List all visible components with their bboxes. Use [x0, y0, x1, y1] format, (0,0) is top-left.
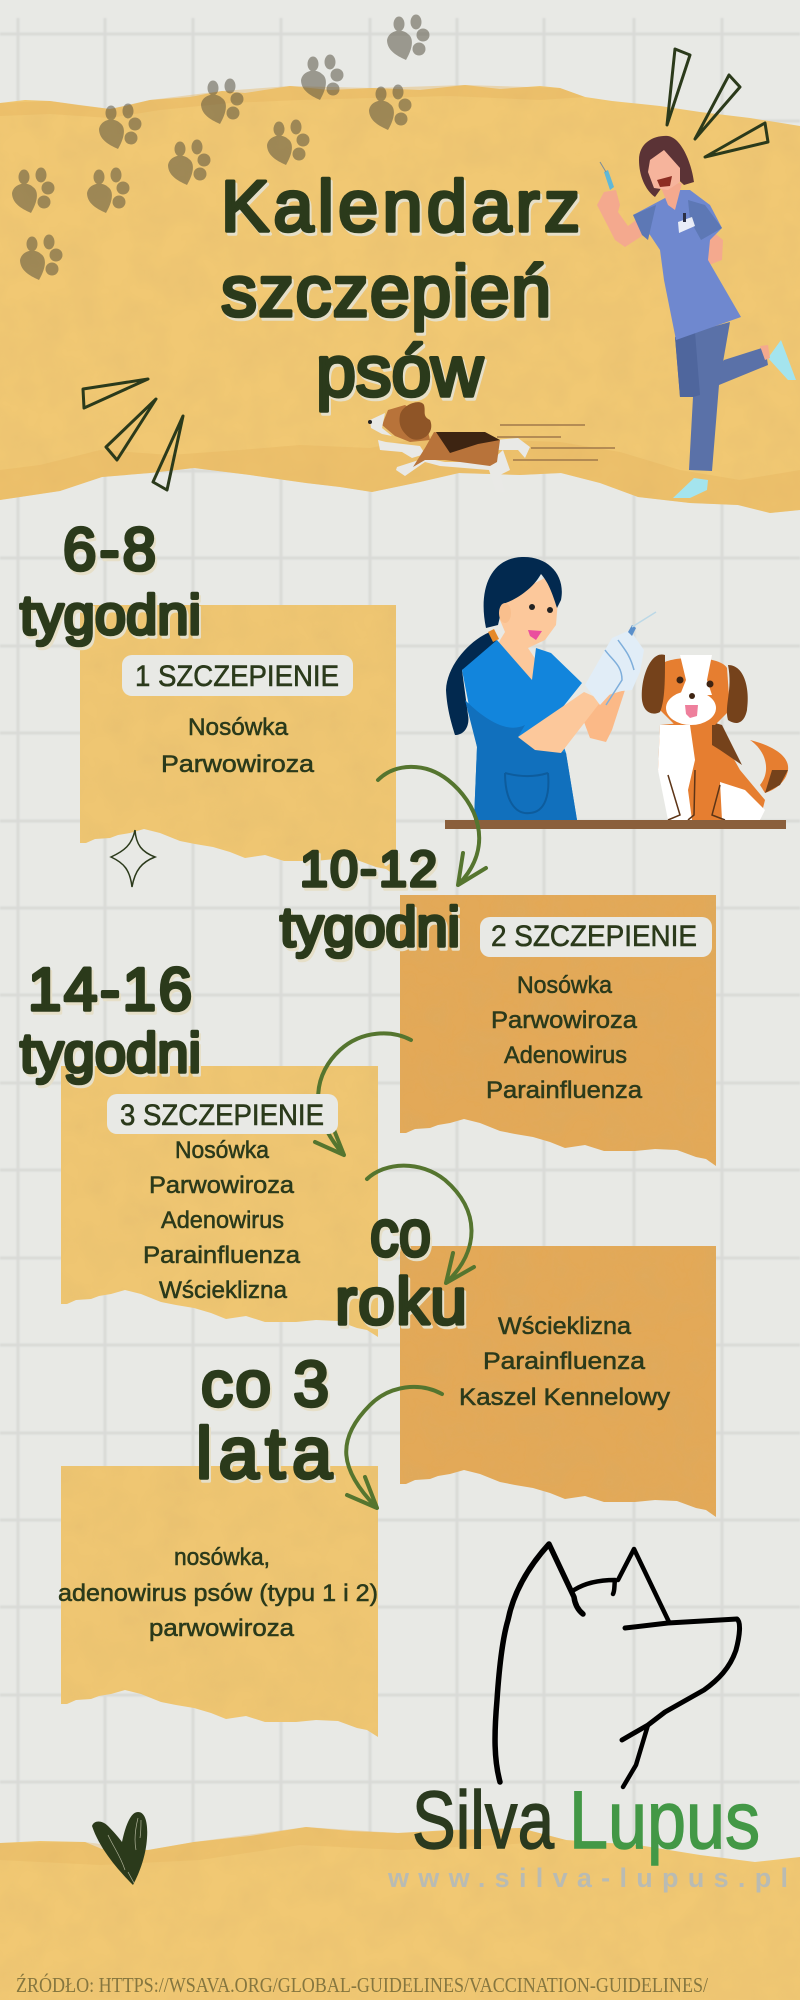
title: psów — [316, 332, 484, 412]
list: third vaccination: Wścieklizna — [159, 1277, 288, 1304]
illustration: nurse running — [597, 136, 796, 498]
label: 10-12 weeks: 10-12 — [300, 841, 437, 897]
list: first vaccination: Parwowiroza — [161, 751, 315, 778]
label: 6-8 weeks: 6-8 — [63, 516, 156, 583]
arrow: 2 to 3 — [315, 1033, 411, 1155]
list: second vaccination — [486, 972, 643, 1104]
logo: Silva Lupus wordmark — [412, 1775, 760, 1866]
list: second vaccination: Parwowiroza — [491, 1007, 638, 1034]
list: second vaccination: Parainfluenza — [486, 1077, 643, 1104]
list: every 3 years vaccination — [58, 1544, 378, 1642]
label: 10-12 weeks: tygodni — [280, 895, 460, 958]
label: every year — [335, 1196, 467, 1338]
list: every 3 years vaccination: parwowiroza — [149, 1615, 295, 1642]
icon: spikes left — [83, 379, 183, 490]
list: third vaccination — [143, 1137, 301, 1304]
list: third vaccination: Adenowirus — [161, 1207, 284, 1234]
panel: footer torn paper — [0, 1827, 800, 2000]
illustration: puppy — [642, 654, 788, 820]
logo: Silva Lupus wordmark: Silva — [412, 1775, 554, 1866]
pill: 1 szczepienie: 1 SZCZEPIENIE — [135, 660, 339, 693]
list: second vaccination: Nosówka — [517, 972, 613, 999]
website address: www.silva-lupus.pl — [387, 1863, 788, 1893]
list: yearly vaccination: Parainfluenza — [483, 1348, 646, 1375]
logo: wolf outline — [495, 1544, 740, 1787]
title: Kalendarz — [221, 167, 580, 247]
list: second vaccination: Adenowirus — [504, 1042, 627, 1069]
panel: header torn paper — [0, 85, 800, 513]
icon: heart — [92, 1812, 147, 1885]
arrow: yearly to 3 years — [346, 1387, 442, 1508]
label: every 3 years — [196, 1348, 333, 1494]
title: szczepień — [221, 252, 551, 332]
list: yearly vaccination: Wścieklizna — [498, 1313, 632, 1340]
list: first vaccination — [161, 714, 315, 778]
illustration: running dog — [368, 402, 615, 492]
list: every 3 years vaccination: adenowirus psów (typu 1 i 2) — [58, 1580, 378, 1607]
list: third vaccination: Parainfluenza — [143, 1242, 301, 1269]
icon: sparkle star — [111, 830, 155, 887]
list: yearly vaccination: Kaszel Kennelowy — [459, 1384, 670, 1411]
list: yearly vaccination — [459, 1313, 670, 1411]
logo: Silva Lupus wordmark: Lupus — [569, 1775, 760, 1866]
list: third vaccination: Nosówka — [175, 1137, 270, 1164]
list: first vaccination: Nosówka — [188, 714, 289, 741]
list: third vaccination: Parwowiroza — [149, 1172, 295, 1199]
arrow: 3 to yearly — [367, 1166, 474, 1283]
label: 6-8 weeks: tygodni — [20, 583, 201, 646]
label: 10-12 weeks — [280, 841, 460, 958]
label: every year: roku — [335, 1264, 467, 1338]
icon: spikes top right — [667, 49, 768, 157]
label: 14-16 weeks: 14-16 — [28, 956, 192, 1023]
panel: 14-16 weeks — [61, 1066, 378, 1337]
pill: 3 szczepienie: 3 SZCZEPIENIE — [120, 1099, 324, 1132]
arrow: 1 to 2 — [378, 767, 486, 885]
label: every year: co — [370, 1196, 431, 1270]
label: every 3 years: co 3 — [201, 1348, 329, 1420]
panel: every 3 years — [61, 1466, 378, 1737]
illustration: vet with syringe — [446, 557, 656, 820]
panel: 10-12 weeks — [400, 895, 716, 1166]
label: 6-8 weeks — [20, 516, 201, 646]
list: every 3 years vaccination: nosówka, — [174, 1544, 270, 1571]
table shelf — [445, 820, 786, 829]
panel: 6-8 weeks — [80, 605, 396, 876]
label: every 3 years: lata — [196, 1414, 333, 1494]
source note: ŹRÓDŁO: HTTPS://WSAVA.ORG/GLOBAL-GUIDELINES/VACCINATION-GUIDELINES/ — [16, 1973, 708, 1997]
pill: 2 szczepienie: 2 SZCZEPIENIE — [491, 920, 697, 953]
label: 14-16 weeks — [20, 956, 201, 1084]
label: 14-16 weeks: tygodni — [20, 1021, 201, 1084]
paw prints trail — [12, 14, 430, 280]
title — [221, 167, 580, 412]
panel: every year — [400, 1246, 716, 1517]
